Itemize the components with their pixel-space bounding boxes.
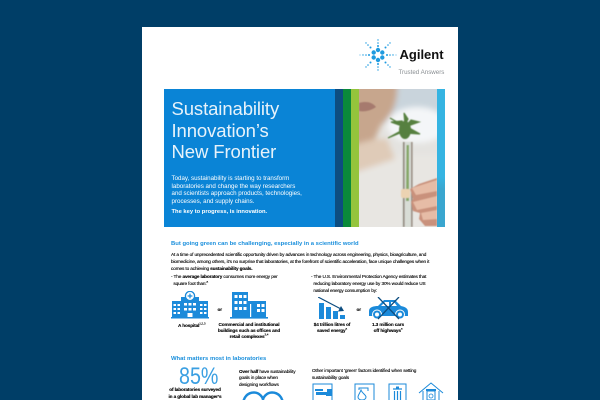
hero key message: The key to progress, is innovation. [172, 208, 267, 214]
bullet: EPA estimate: reducing laboratory energy use by 30% would reduce US [313, 281, 426, 286]
icon: declining bar chart [318, 297, 345, 319]
icon: chemical bottle [354, 384, 374, 400]
bullet: EPA estimate: national energy consumption by: [313, 288, 377, 293]
text: sustainability goals: Over half have sustainability [239, 368, 295, 374]
caption: commercial buildings: Commercial and institutional [218, 322, 279, 326]
label: or: or [218, 306, 222, 312]
icon: crossed-out car [369, 297, 408, 320]
text: sustainability goals: goals in place when [239, 375, 278, 380]
hero title [172, 98, 280, 162]
icon: hospital [171, 291, 209, 318]
heading: going green: But going green can be challenging, especially in a scientific world [171, 241, 359, 247]
hero stripe: light blue [437, 89, 445, 227]
stat: 85%: 85% [179, 363, 218, 390]
caption: commercial buildings [218, 322, 280, 339]
hero intro text: Today, sustainability is starting to transform [172, 175, 289, 182]
intro paragraph [171, 252, 430, 271]
text: other green factors: sustainability goals [312, 374, 349, 380]
intro paragraph: biomedicine, among others, it’s no surprise that laboratories, at the forefront of scientific acceleration, face unique challenges when it [171, 258, 429, 264]
caption: saved energy [314, 322, 350, 333]
intro paragraph: At a time of unprecedented scientific opportunity driven by advances in technology across engineering, physics, bioagriculture, and [171, 252, 426, 256]
hero title: New Frontier [172, 141, 276, 162]
hero title: Sustainability [172, 98, 279, 119]
icon: recycling house [418, 382, 444, 400]
caption: commercial buildings: retail complexes3,4 [230, 332, 268, 339]
page sheet [142, 27, 458, 400]
bullet: EPA estimate [311, 274, 426, 293]
text: other green factors [312, 368, 416, 380]
heading: what matters most: What matters most in laboratories [171, 356, 266, 362]
icon: commercial buildings [230, 292, 268, 319]
caption: cars off highways: off highwaysa [374, 326, 402, 333]
caption: cars off highways [372, 322, 404, 333]
stat text: laboratories surveyed [168, 387, 222, 399]
hero intro text: laboratories and change the way researchers [172, 183, 295, 190]
icon: water tap [312, 384, 332, 400]
bullet: average laboratory [171, 274, 278, 286]
icon: Agilent spark [360, 39, 396, 71]
text: sustainability goals [239, 368, 296, 387]
logo wordmark: Agilent [400, 47, 444, 62]
bullet: average laboratory: square foot than:a [173, 279, 208, 286]
bullet: EPA estimate: - The U.S. Environmental Protection Agency estimates that [311, 274, 426, 279]
hero photo: scientist holding a test tube with a plant [359, 89, 437, 227]
hero banner [164, 89, 445, 227]
hero title: Innovation’s [172, 120, 269, 141]
stat text: laboratories surveyed: in a global lab manager’s [168, 394, 222, 399]
hero intro text [172, 175, 302, 205]
hero intro text: processes, and supply chains. [172, 198, 254, 205]
text: other green factors: Other important ‘green’ factors identified when setting [312, 368, 416, 372]
icon: infinity loop [242, 391, 284, 400]
caption: saved energy: $4 trillion litres of [314, 322, 350, 326]
label: or: or [356, 306, 361, 312]
caption: commercial buildings: buildings such as offices and [218, 328, 280, 333]
logo tagline: Trusted Answers [398, 69, 444, 76]
hero stripe: blue-navy-green-lime [335, 89, 359, 227]
stat text: laboratories surveyed: of laboratories surveyed [169, 387, 221, 392]
caption: saved energy: saved energya [317, 326, 347, 333]
bullet: average laboratory: - The average laboratory consumes more energy per [171, 274, 278, 279]
caption: cars off highways: 1.3 million cars [372, 322, 404, 326]
icon: waste bin [388, 384, 406, 400]
text: sustainability goals: designing workflows [239, 382, 279, 387]
intro paragraph: comes to achieving sustainability goals. [171, 266, 252, 270]
caption: hospital: A hospital1,2,3 [178, 321, 205, 328]
logo: Agilent [360, 39, 444, 76]
hero intro text: and scientists approach products, technologies, [172, 190, 302, 197]
